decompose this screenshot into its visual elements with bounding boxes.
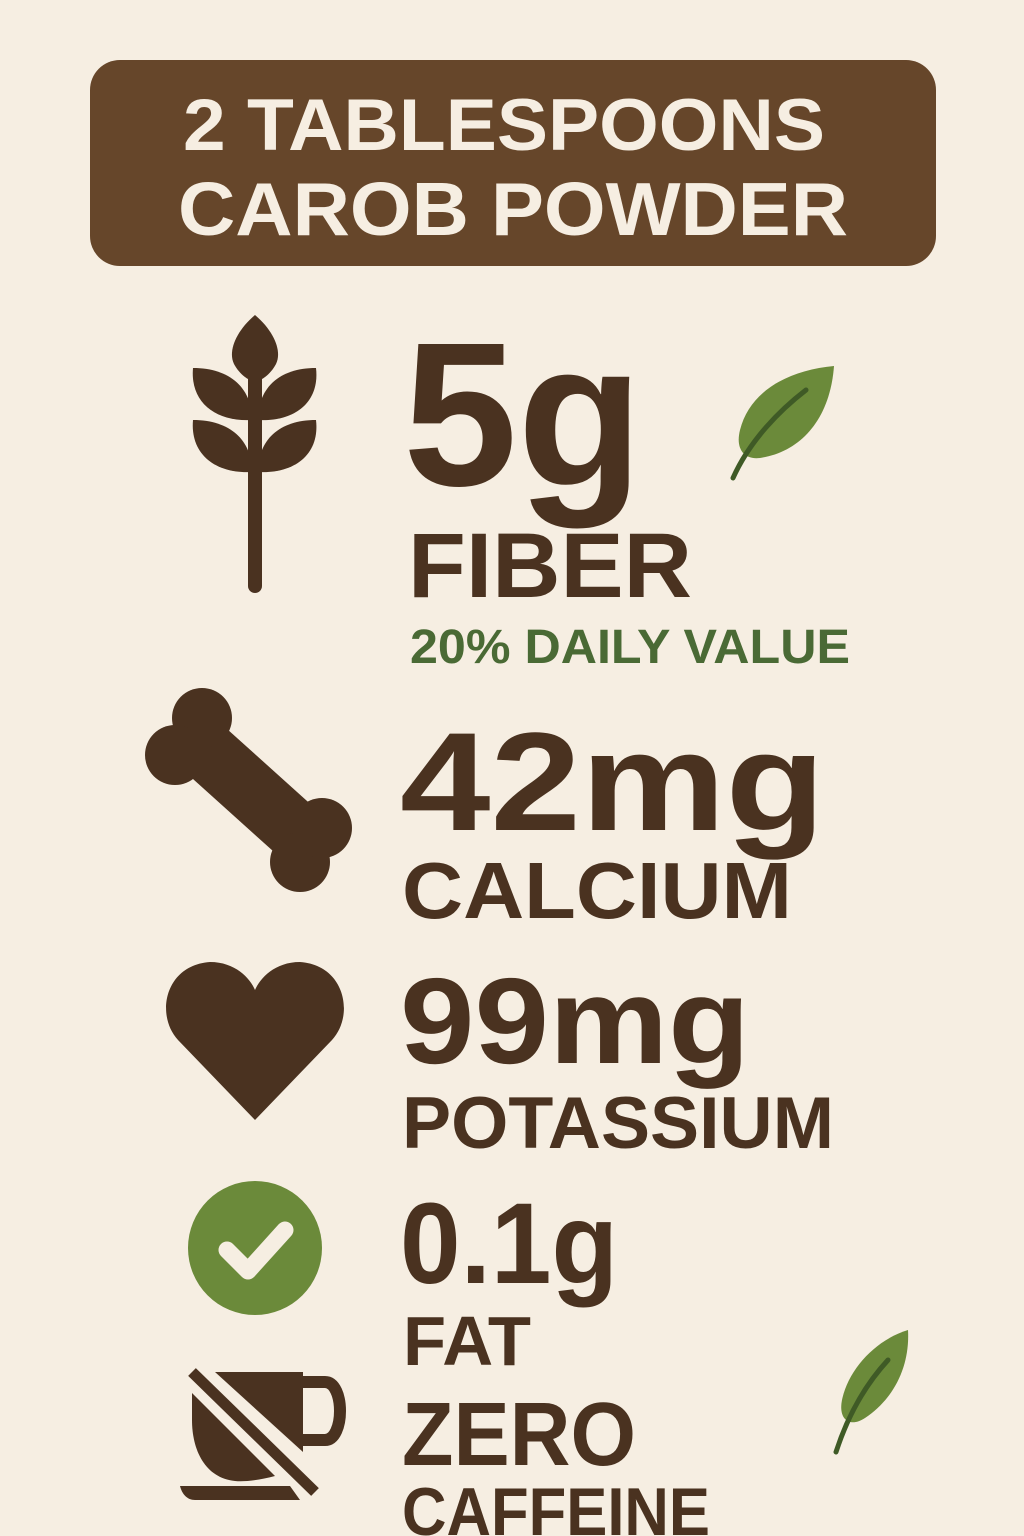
stat: potassium: [400, 953, 834, 1164]
stat: calcium: [400, 703, 825, 935]
leaf: top right: [733, 366, 834, 478]
stat: potassium: POTASSIUM: [402, 1083, 834, 1164]
title banner: [90, 60, 936, 266]
icon: bone: [145, 688, 352, 892]
title banner: CAROB POWDER: [178, 167, 848, 251]
stat: fiber: FIBER: [408, 515, 692, 617]
stat: potassium: 99mg: [400, 953, 750, 1089]
title banner: 2 TABLESPOONS: [183, 85, 825, 166]
stat: caffeine: ZERO: [402, 1385, 636, 1485]
stat: fat: FAT: [403, 1302, 531, 1380]
icon: wheat: [193, 315, 316, 593]
icon: heart: [166, 962, 344, 1120]
leaf: bottom right: [836, 1330, 908, 1452]
stat: fat: 0.1g: [400, 1180, 618, 1308]
stat: calcium: 42mg: [400, 703, 825, 860]
stat: calcium: CALCIUM: [402, 846, 792, 935]
icon: no caffeine cup: [180, 1372, 340, 1500]
stat: fiber: 5g: [403, 300, 643, 529]
stat: caffeine: [402, 1385, 710, 1536]
stat: fiber: 20% DAILY VALUE: [410, 621, 850, 674]
icon: check circle: [188, 1181, 322, 1315]
stat: fat: [400, 1180, 618, 1380]
stat: fiber: [403, 300, 850, 674]
